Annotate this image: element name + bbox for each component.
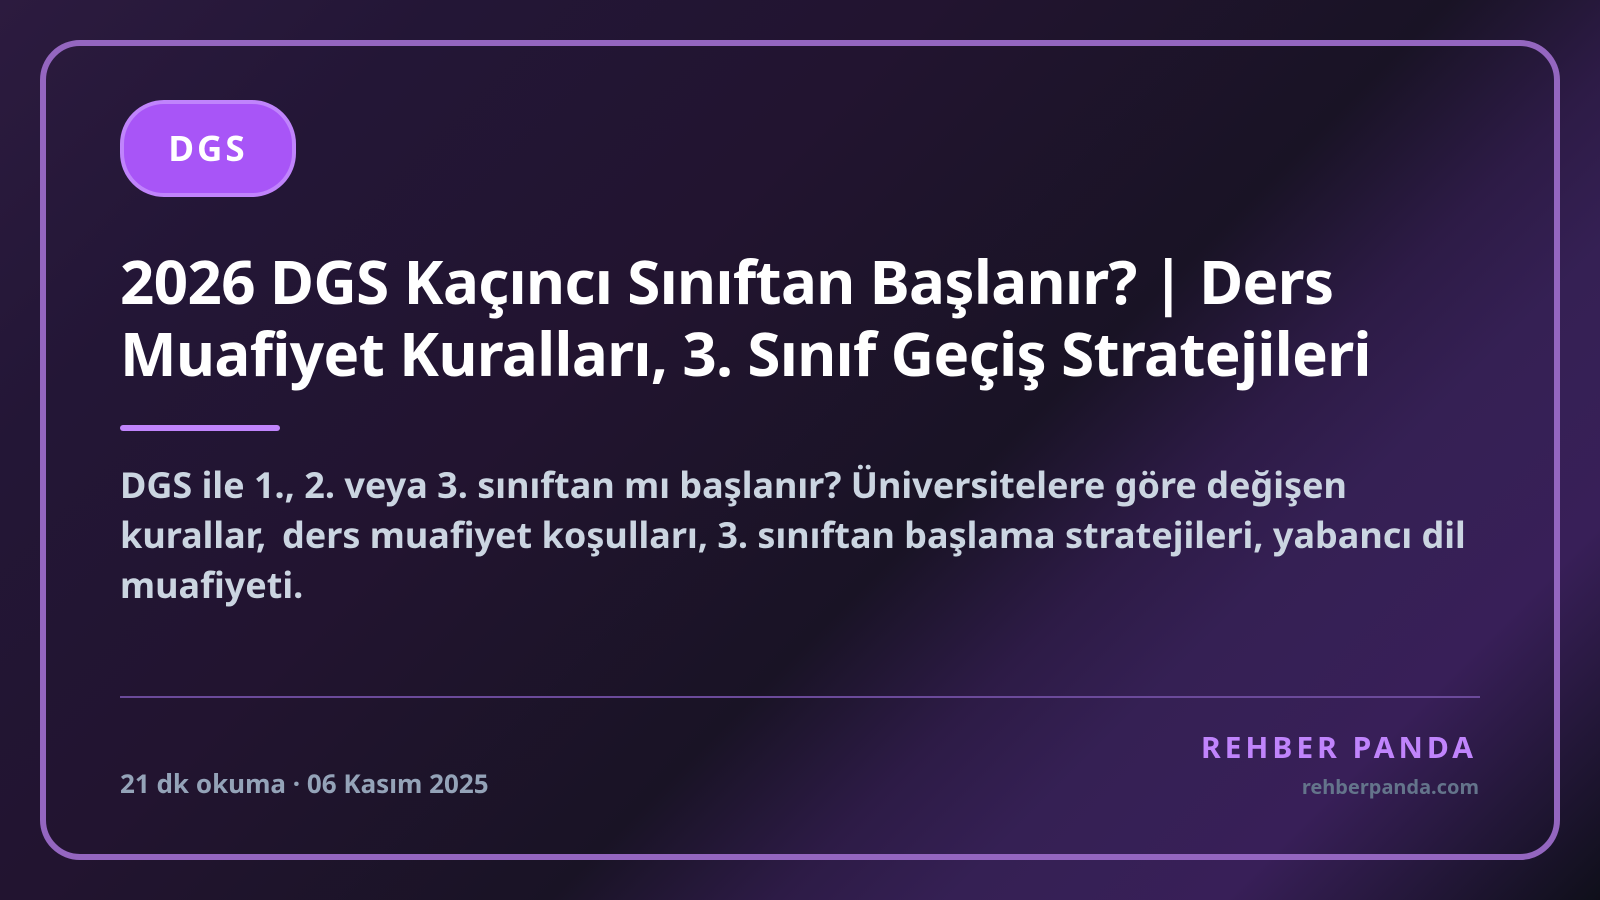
divider — [120, 696, 1480, 698]
description: muafiyeti. — [120, 560, 303, 609]
badge: DGS: DGS — [168, 125, 248, 172]
description: DGS ile 1., 2. veya 3. sınıftan mı başlanır? Üniversitelere göre değişen — [120, 460, 1347, 509]
description: kurallar, ders muafiyet koşulları, 3. sınıftan başlama stratejileri, yabancı dil — [120, 510, 1466, 559]
title: 2026 DGS Kaçıncı Sınıftan Başlanır? | Ders — [120, 240, 1334, 322]
badge: DGS — [120, 100, 296, 197]
brand url: rehberpanda.com — [1302, 773, 1479, 800]
title: Muafiyet Kuralları, 3. Sınıf Geçiş Stratejileri — [120, 312, 1371, 394]
description — [120, 460, 1466, 609]
meta: reading time and date: 21 dk okuma · 06 Kasım 2025 — [120, 765, 489, 801]
brand name: REHBER PANDA — [1201, 726, 1477, 767]
accent bar — [120, 425, 280, 431]
title — [120, 240, 1371, 394]
